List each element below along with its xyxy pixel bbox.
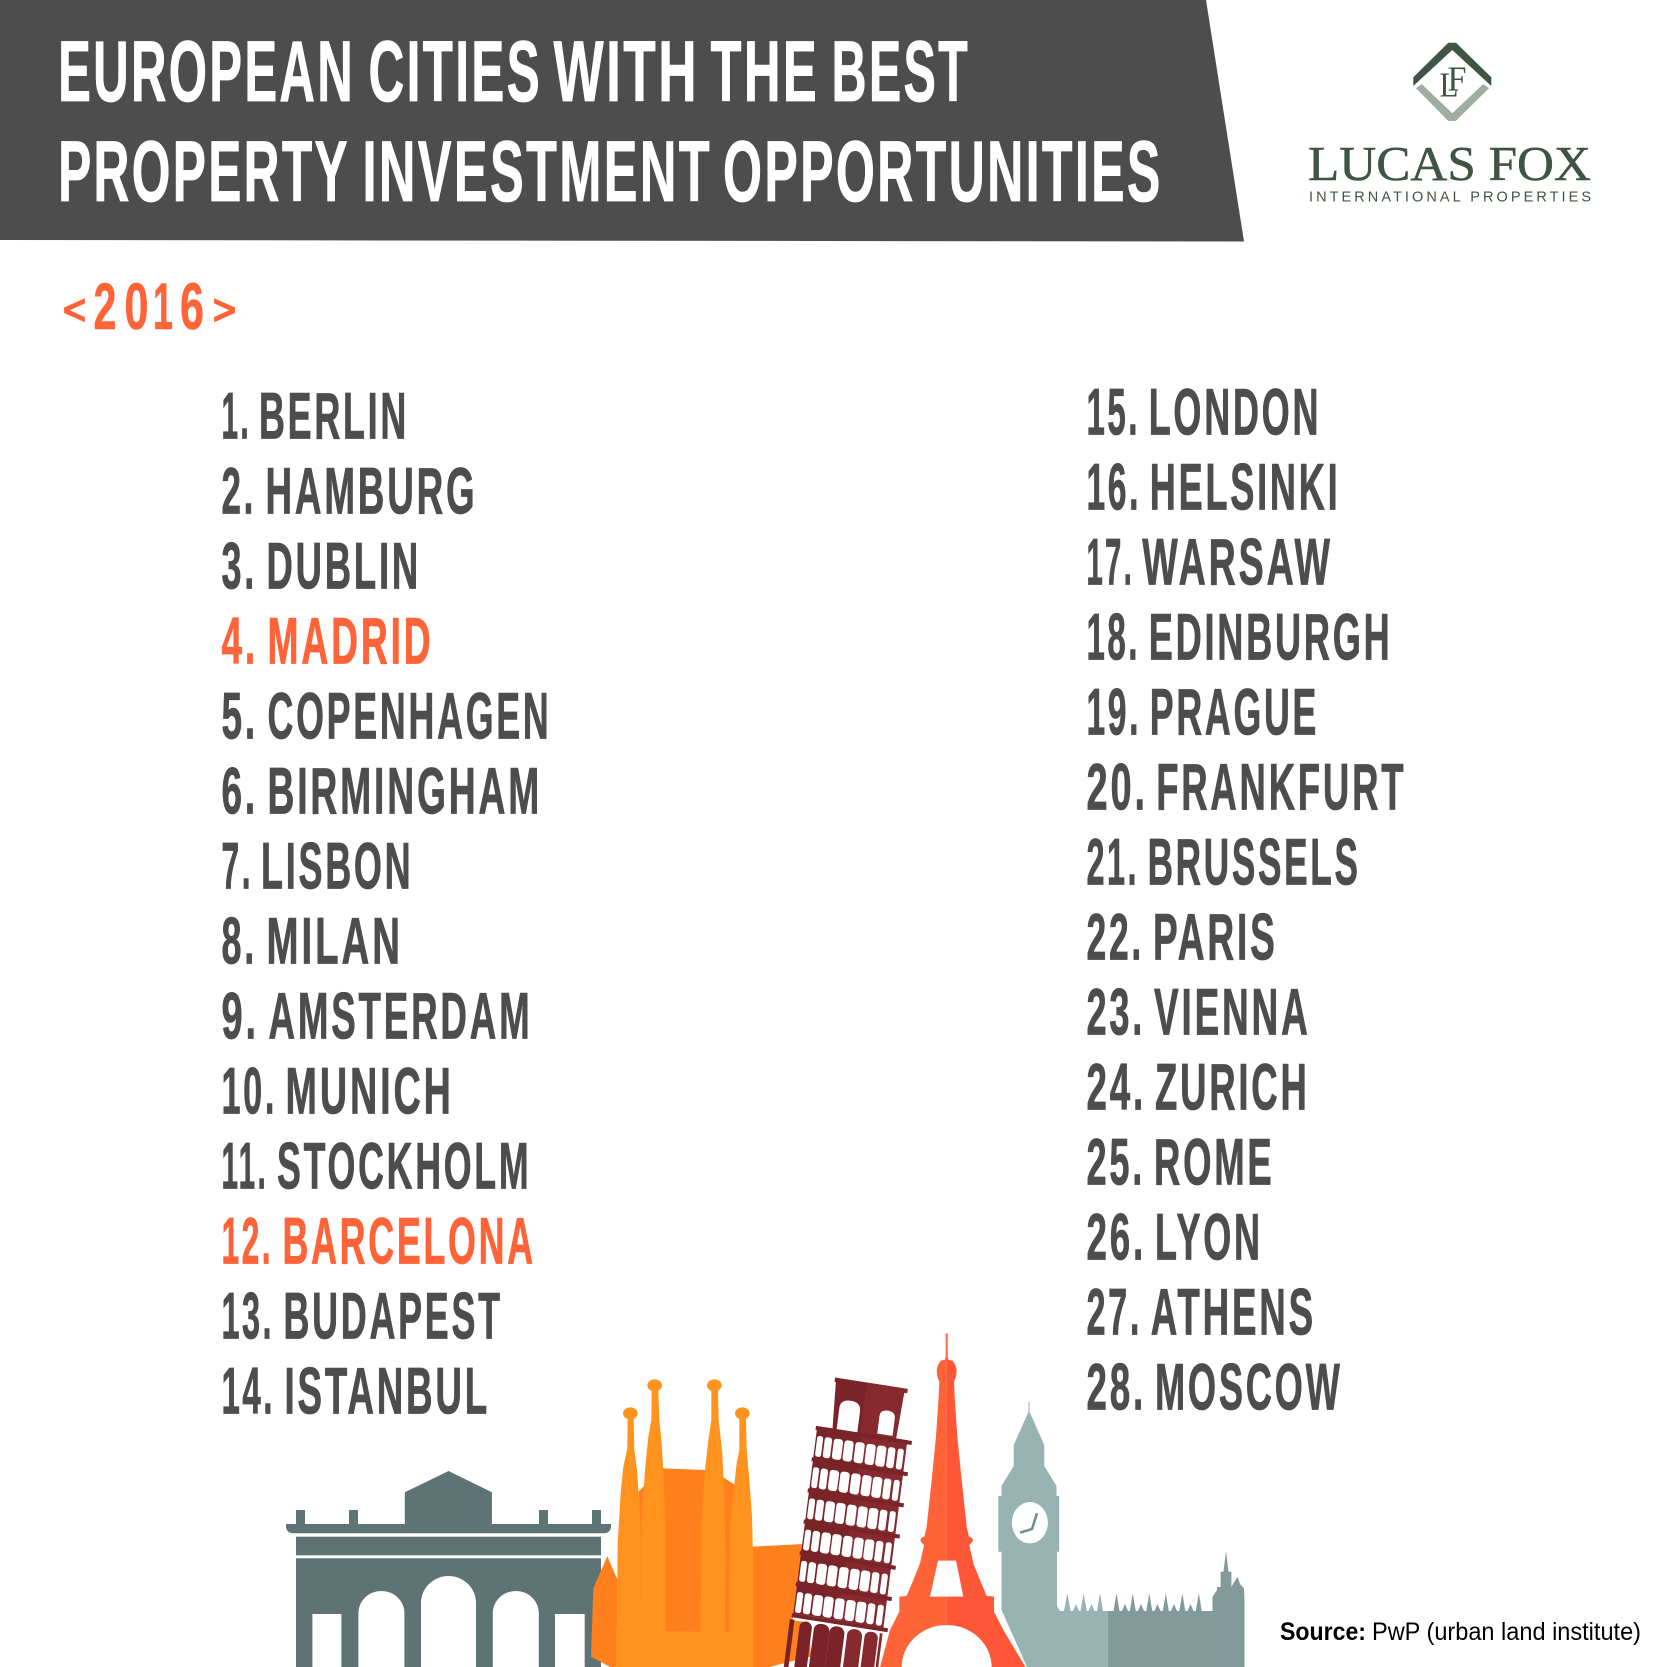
rank 24: 24. — [1086, 1050, 1146, 1123]
rank 2 — [222, 454, 478, 527]
rank 26 — [1086, 1200, 1263, 1273]
header banner — [0, 0, 1244, 242]
rank 6: BIRMINGHAM — [268, 754, 542, 827]
rank 13: 13. — [222, 1279, 274, 1352]
rank 19: 19. — [1086, 675, 1141, 748]
rank 14 — [222, 1354, 490, 1427]
rank 28: MOSCOW — [1155, 1350, 1342, 1423]
rank 2: 2. — [222, 454, 256, 527]
rank 4 highlighted: MADRID — [268, 604, 434, 677]
rank 22: 22. — [1086, 900, 1144, 973]
rank 17 — [1086, 525, 1333, 598]
rank 24 — [1086, 1050, 1310, 1123]
rank 17: WARSAW — [1142, 525, 1333, 598]
rank 10 — [222, 1054, 454, 1127]
icon: diamond emblem — [1413, 43, 1491, 121]
rank 27 — [1086, 1275, 1316, 1348]
city list: right column — [1086, 375, 1406, 1423]
rank 7: LISBON — [261, 829, 413, 902]
icon: Leaning Tower of Pisa — [783, 1375, 918, 1667]
rank 8: 8. — [222, 904, 257, 977]
year label: 2 — [94, 270, 116, 343]
rank 23: VIENNA — [1154, 975, 1311, 1048]
rank 1: BERLIN — [259, 379, 409, 452]
brand name: LUCAS FOX — [1308, 136, 1591, 191]
title: WITH — [554, 24, 699, 120]
city list: left column — [222, 379, 552, 1427]
rank 14: 14. — [222, 1354, 275, 1427]
rank 2: HAMBURG — [266, 454, 478, 527]
rank 9: AMSTERDAM — [268, 979, 532, 1052]
title: PROPERTY — [58, 124, 350, 220]
rank 15: LONDON — [1149, 375, 1321, 448]
rank 28 — [1086, 1350, 1342, 1423]
rank 10: MUNICH — [286, 1054, 454, 1127]
rank 1: 1. — [222, 379, 251, 452]
rank 11 — [222, 1129, 531, 1202]
rank 5: COPENHAGEN — [268, 679, 552, 752]
rank 22: PARIS — [1153, 900, 1278, 973]
rank 19 — [1086, 675, 1319, 748]
rank 25: ROME — [1154, 1125, 1274, 1198]
rank 26: 26. — [1086, 1200, 1146, 1273]
icon: Eiffel Tower — [880, 1333, 1026, 1667]
rank 5 — [222, 679, 552, 752]
icon: Sagrada Familia — [591, 1379, 811, 1667]
title: OPPORTUNITIES — [723, 124, 1163, 220]
rank 18: EDINBURGH — [1149, 600, 1392, 673]
source note: Source: — [1280, 1618, 1366, 1646]
rank 9: 9. — [222, 979, 259, 1052]
brand tagline: INTERNATIONAL PROPERTIES — [1309, 190, 1591, 206]
rank 25 — [1086, 1125, 1274, 1198]
rank 13: BUDAPEST — [284, 1279, 503, 1352]
logo: Lucas Fox — [1308, 43, 1591, 206]
rank 12 highlighted: BARCELONA — [282, 1204, 536, 1277]
skyline illustration — [286, 1333, 1244, 1667]
rank 6 — [222, 754, 542, 827]
icon: diamond emblem: F — [1448, 60, 1466, 99]
year label — [63, 270, 236, 343]
rank 16: HELSINKI — [1150, 450, 1340, 523]
rank 12 highlighted — [222, 1204, 536, 1277]
rank 11: STOCKHOLM — [277, 1129, 531, 1202]
rank 15: 15. — [1086, 375, 1140, 448]
rank 27: ATHENS — [1151, 1275, 1316, 1348]
rank 25: 25. — [1086, 1125, 1145, 1198]
rank 20: FRANKFURT — [1156, 750, 1406, 823]
rank 12 highlighted: 12. — [222, 1204, 273, 1277]
year label: < — [63, 286, 86, 333]
rank 26: LYON — [1155, 1200, 1263, 1273]
rank 5: 5. — [222, 679, 258, 752]
title — [58, 24, 1163, 220]
rank 3 — [222, 529, 421, 602]
rank 3: DUBLIN — [266, 529, 421, 602]
title: EUROPEAN — [58, 24, 355, 120]
rank 17: 17. — [1086, 525, 1134, 598]
rank 1 — [222, 379, 409, 452]
year label: 0 — [124, 270, 148, 343]
rank 13 — [222, 1279, 503, 1352]
rank 16 — [1086, 450, 1340, 523]
rank 16: 16. — [1086, 450, 1141, 523]
rank 22 — [1086, 900, 1278, 973]
year label: > — [213, 286, 236, 333]
rank 6: 6. — [222, 754, 258, 827]
rank 4 highlighted — [222, 604, 434, 677]
rank 21: 21. — [1086, 825, 1139, 898]
title: THE — [710, 24, 819, 120]
rank 28: 28. — [1086, 1350, 1146, 1423]
icon: diamond emblem: L — [1440, 66, 1458, 104]
rank 10: 10. — [222, 1054, 277, 1127]
year label: 1 — [153, 270, 173, 343]
title: CITIES — [368, 24, 542, 120]
rank 21 — [1086, 825, 1361, 898]
rank 4 highlighted: 4. — [222, 604, 258, 677]
title: INVESTMENT — [362, 124, 712, 220]
rank 20 — [1086, 750, 1406, 823]
rank 11: 11. — [222, 1129, 268, 1202]
rank 7 — [222, 829, 413, 902]
rank 7: 7. — [222, 829, 253, 902]
rank 24: ZURICH — [1155, 1050, 1310, 1123]
rank 18 — [1086, 600, 1392, 673]
icon: Puerta de Alcala — [286, 1471, 611, 1667]
rank 3: 3. — [222, 529, 257, 602]
source note: PwP (urban land institute) — [1372, 1618, 1641, 1646]
rank 19: PRAGUE — [1150, 675, 1319, 748]
rank 23 — [1086, 975, 1311, 1048]
rank 14: ISTANBUL — [284, 1354, 490, 1427]
rank 18: 18. — [1086, 600, 1140, 673]
rank 8 — [222, 904, 403, 977]
rank 21: BRUSSELS — [1148, 825, 1361, 898]
icon: Big Ben and Parliament — [998, 1402, 1244, 1667]
rank 15 — [1086, 375, 1321, 448]
rank 8: MILAN — [266, 904, 403, 977]
rank 23: 23. — [1086, 975, 1145, 1048]
rank 20: 20. — [1086, 750, 1148, 823]
rank 27: 27. — [1086, 1275, 1142, 1348]
title: BEST — [832, 24, 970, 120]
rank 9 — [222, 979, 532, 1052]
year label: 6 — [180, 270, 204, 343]
